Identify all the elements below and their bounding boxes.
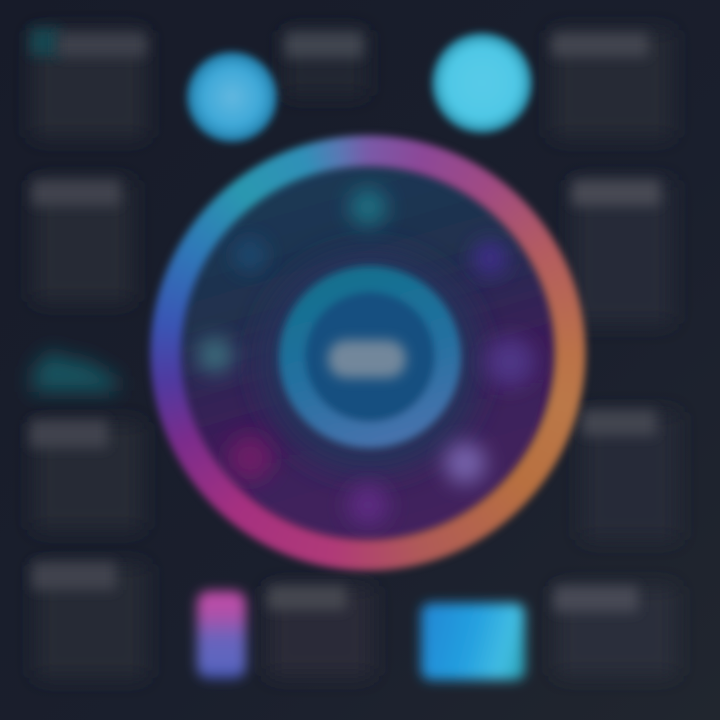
panel: top left [30,28,146,138]
outer gradient ring [145,130,592,576]
panel: bottom left [32,562,146,678]
icon: cyan circle [432,33,532,133]
panel: left middle [32,180,132,302]
icon: blue tile [421,603,525,680]
panel: bottom right [554,586,676,676]
central disc [178,163,558,543]
panel: right middle [572,180,672,324]
disc icon markers [197,188,535,526]
panel: bottom middle [268,586,372,676]
chart: teal mini chart [32,350,116,392]
inner blue ring [292,279,448,435]
disc halo [258,250,482,474]
icon: blue circle [187,52,277,142]
icon: gradient pill [197,591,246,679]
panel: top right [552,30,672,138]
panel: right lower [582,410,678,540]
panel: top middle [284,30,366,96]
panel: left lower [30,420,142,530]
center label [328,340,406,378]
